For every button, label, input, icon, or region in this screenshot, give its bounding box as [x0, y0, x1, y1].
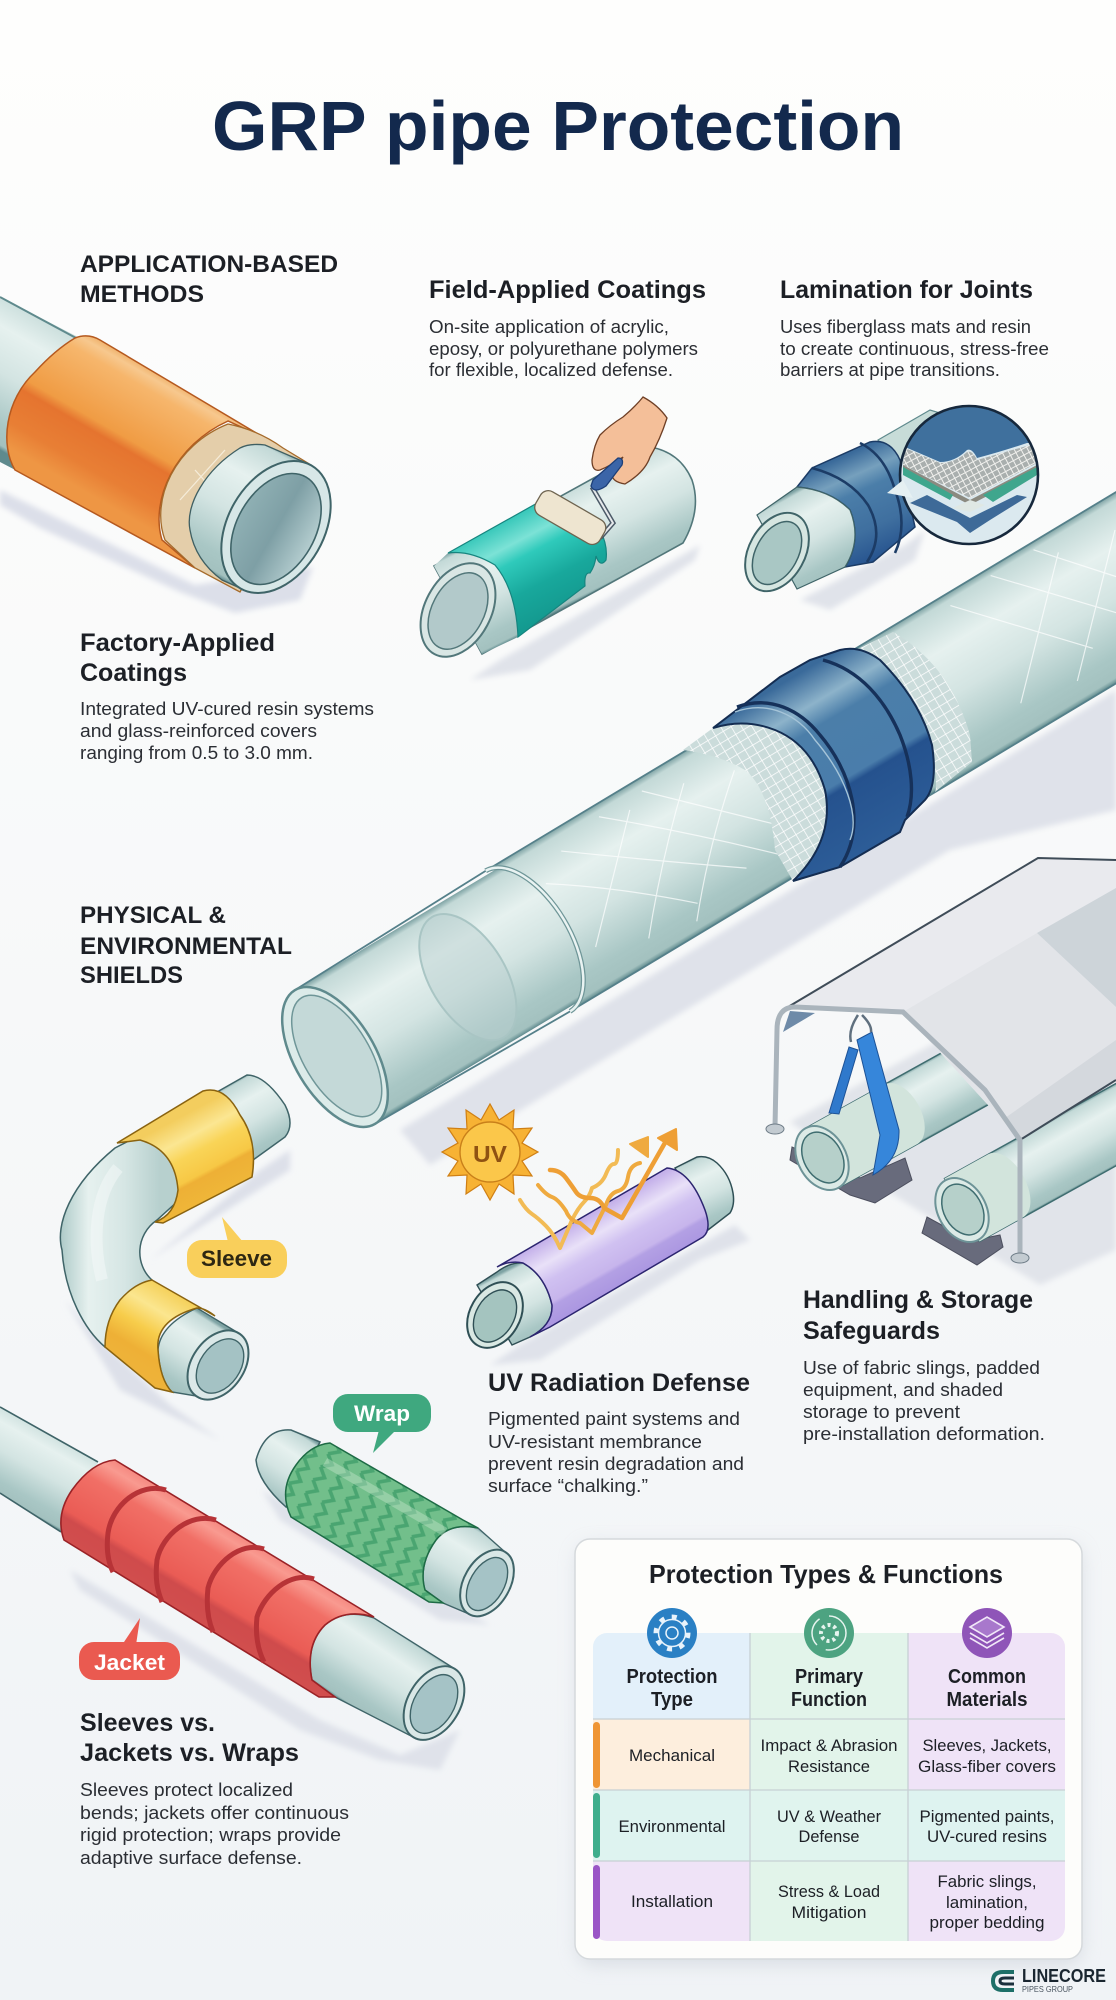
callout: Sleeve: Sleeve — [201, 1246, 272, 1271]
pipe body — [258, 472, 1116, 1148]
glass tube — [189, 444, 311, 588]
heading: physical and environmental shields — [80, 902, 292, 989]
teal coating — [448, 497, 606, 637]
text block: handling and storage safeguards: pre-installation deformation. — [803, 1424, 1045, 1444]
table header: Type — [651, 1689, 693, 1711]
table row: environmental: UV & Weather — [777, 1808, 881, 1826]
tube — [757, 487, 855, 589]
upper sleeve — [117, 1090, 254, 1223]
icon: layered materials — [962, 1608, 1012, 1658]
text block: sleeves vs jackets vs wraps: Sleeves protect localized — [80, 1780, 293, 1800]
text block: sleeves vs jackets vs wraps — [80, 1709, 349, 1868]
arrows: UV rays reflecting — [520, 1129, 677, 1248]
illustration: red jacket pipe — [0, 1407, 477, 1770]
text block: factory-applied coatings: Integrated UV-cured resin systems — [80, 699, 374, 719]
text block: field-applied coatings: for flexible, localized defense. — [429, 360, 673, 380]
icon: paint roller and hand — [531, 397, 667, 548]
callout: Wrap — [333, 1394, 431, 1453]
blue joint wrap — [797, 441, 915, 567]
icon: gear — [647, 1608, 697, 1658]
near mesh wrap — [683, 723, 827, 881]
table row: mechanical: Impact & Abrasion — [760, 1737, 898, 1755]
table header: Common — [948, 1666, 1026, 1688]
blue joint band — [713, 649, 934, 881]
logo: Linecore Pipes Group: LINECORE — [1022, 1966, 1106, 1986]
fibre cross-hatch — [528, 478, 1116, 978]
title: GRP pipe Protection — [212, 87, 904, 165]
table row: mechanical — [629, 1737, 1056, 1776]
row accent: green — [593, 1793, 600, 1858]
pipe rim — [456, 1272, 534, 1358]
text block: field-applied coatings — [429, 276, 706, 380]
text block: sleeves vs jackets vs wraps: rigid protection; wraps provide — [80, 1825, 341, 1845]
table header: Protection — [626, 1666, 718, 1688]
elbow bend — [60, 1130, 190, 1347]
table row: environmental: Environmental — [618, 1818, 726, 1836]
text block: field-applied coatings: On-site application of acrylic, — [429, 317, 669, 337]
text block: lamination for joints: to create continuous, stress-free — [780, 339, 1049, 359]
text block: lamination for joints: Lamination for Joints — [780, 276, 1033, 304]
icon: sun with UV label — [442, 1104, 538, 1200]
near tube — [477, 1263, 552, 1345]
table header: Materials — [946, 1689, 1028, 1711]
text block: lamination for joints — [780, 276, 1049, 380]
stored pipe A — [785, 968, 1116, 1199]
illustration: storage canopy with pipes — [766, 858, 1116, 1285]
pipe rim — [449, 1540, 525, 1626]
text block: handling and storage safeguards: Handling & Storage — [803, 1286, 1033, 1314]
canopy roof — [788, 858, 1116, 1140]
far tube — [0, 1407, 98, 1532]
text block: handling and storage safeguards: equipment, and shaded — [803, 1380, 1003, 1400]
table row: installation: Fabric slings, — [938, 1873, 1036, 1891]
orange coating — [7, 336, 263, 568]
text block: field-applied coatings: Field-Applied Coatings — [429, 276, 706, 304]
table header: Primary — [795, 1666, 864, 1688]
heading: physical and environmental shields: PHYSICAL & — [80, 902, 226, 929]
table row: installation — [631, 1873, 1044, 1932]
pipe rim — [732, 502, 822, 602]
pipe rim — [391, 1655, 477, 1751]
text block: lamination for joints: Uses fiberglass mats and resin — [780, 317, 1031, 337]
text block: factory-applied coatings — [80, 629, 374, 763]
logo: Linecore Pipes Group — [993, 1966, 1106, 1994]
near tube — [423, 1526, 505, 1614]
heading: application-based methods: METHODS — [80, 281, 204, 308]
lower sleeve — [105, 1280, 215, 1392]
logo: Linecore Pipes Group: PIPES GROUP — [1022, 1984, 1073, 1994]
green wrap — [286, 1443, 478, 1603]
beige fibre layer — [161, 424, 311, 592]
text block: factory-applied coatings: Factory-Applied — [80, 629, 275, 657]
table row: installation: lamination, — [946, 1894, 1028, 1912]
illustration: elbow with sleeves — [60, 1075, 290, 1440]
jacket grooves — [107, 1488, 314, 1662]
text block: handling and storage safeguards: storage to prevent — [803, 1402, 960, 1422]
text block: lamination for joints: barriers at pipe transitions. — [780, 360, 1000, 380]
text block: UV radiation defense: UV-resistant membrance — [488, 1432, 702, 1452]
callout: Jacket: Jacket — [94, 1650, 166, 1675]
text block: handling and storage safeguards: Use of fabric slings, padded — [803, 1358, 1040, 1378]
heading: physical and environmental shields: SHIELDS — [80, 962, 183, 989]
heading: application-based methods: APPLICATION-BASED — [80, 251, 338, 278]
text block: sleeves vs jackets vs wraps: Jackets vs. Wraps — [80, 1739, 299, 1767]
table row: mechanical: Mechanical — [629, 1747, 715, 1765]
table header — [626, 1666, 1028, 1711]
icon: cycle gear — [804, 1608, 854, 1658]
ground shadow — [790, 960, 1116, 1285]
far tube — [878, 410, 940, 470]
padded support B — [922, 1217, 1003, 1265]
text block: factory-applied coatings: ranging from 0.5 to 3.0 mm. — [80, 743, 313, 763]
table row: installation: Mitigation — [792, 1904, 866, 1922]
illustration: field-applied teal coated pipe — [405, 447, 700, 680]
text block: field-applied coatings: eposy, or polyurethane polymers — [429, 339, 698, 359]
text block: handling and storage safeguards — [803, 1286, 1045, 1444]
red jacket — [61, 1460, 374, 1697]
illustration: green wrap pipe — [256, 1430, 525, 1626]
padded support A — [790, 1147, 912, 1203]
table title: Protection Types & Functions — [649, 1559, 1003, 1589]
illustration: factory-applied coated pipe — [0, 297, 353, 613]
table row: environmental: Defense — [798, 1828, 860, 1846]
row accent: orange — [593, 1722, 600, 1788]
table header: Function — [791, 1689, 867, 1711]
canopy frame — [775, 1007, 1020, 1257]
blue fabric sling — [829, 1015, 899, 1175]
table cell fills — [593, 1633, 1065, 1941]
text block: sleeves vs jackets vs wraps: bends; jackets offer continuous — [80, 1803, 349, 1823]
near tube — [434, 552, 518, 654]
text block: factory-applied coatings: and glass-reinforced covers — [80, 721, 317, 741]
pipe rim — [199, 442, 353, 612]
lower tube end — [158, 1308, 240, 1396]
table row: mechanical: Glass-fiber covers — [918, 1758, 1056, 1776]
callout: Jacket — [79, 1618, 180, 1680]
table row: mechanical: Sleeves, Jackets, — [922, 1737, 1052, 1755]
pipe body — [434, 447, 695, 654]
far glass tube — [0, 297, 80, 475]
table row: environmental: UV-cured resins — [927, 1828, 1047, 1846]
illustration: lamination joint pipe — [732, 410, 940, 610]
text block: factory-applied coatings: Coatings — [80, 659, 187, 687]
text block: UV radiation defense: prevent resin degradation and — [488, 1454, 744, 1474]
pipe shadow — [400, 690, 1116, 1165]
far mesh wrap — [860, 632, 972, 792]
near tube — [310, 1614, 455, 1737]
text block: UV radiation defense: UV Radiation Defense — [488, 1369, 750, 1397]
icon: laminate layers magnifier — [887, 400, 1045, 544]
table row: mechanical: Resistance — [788, 1758, 870, 1776]
upper tube end — [217, 1075, 290, 1160]
callout: Wrap: Wrap — [354, 1401, 410, 1426]
text block: sleeves vs jackets vs wraps: adaptive surface defense. — [80, 1848, 302, 1868]
text block: handling and storage safeguards: Safeguards — [803, 1317, 940, 1345]
text block: sleeves vs jackets vs wraps: Sleeves vs. — [80, 1709, 215, 1737]
row accent: purple — [593, 1865, 600, 1939]
icon: sun with UV label: UV — [473, 1141, 508, 1167]
illustration: UV purple-membrane pipe — [456, 1157, 750, 1365]
text block: UV radiation defense: Pigmented paint systems and — [488, 1409, 740, 1429]
table row: installation: proper bedding — [930, 1914, 1044, 1932]
stored pipe B — [924, 1072, 1116, 1253]
heading: application-based methods — [80, 251, 338, 308]
heading: physical and environmental shields: ENVIRONMENTAL — [80, 933, 292, 960]
illustration: main GRP pipe cross-section — [258, 472, 1116, 1165]
callout: Sleeve — [187, 1217, 287, 1278]
panel: protection types table — [575, 1539, 1082, 1965]
table row: installation: Installation — [631, 1893, 713, 1911]
lower rim — [175, 1319, 261, 1411]
purple membrane — [497, 1168, 708, 1337]
far tube — [675, 1157, 734, 1230]
pipe rim — [405, 550, 511, 670]
text block: UV radiation defense: surface “chalking.” — [488, 1476, 648, 1496]
table row: installation: Stress & Load — [778, 1883, 880, 1901]
table row: environmental: Pigmented paints, — [920, 1808, 1054, 1826]
table row: environmental — [618, 1808, 1054, 1846]
far tube — [256, 1430, 320, 1507]
text block: UV radiation defense — [488, 1369, 750, 1496]
